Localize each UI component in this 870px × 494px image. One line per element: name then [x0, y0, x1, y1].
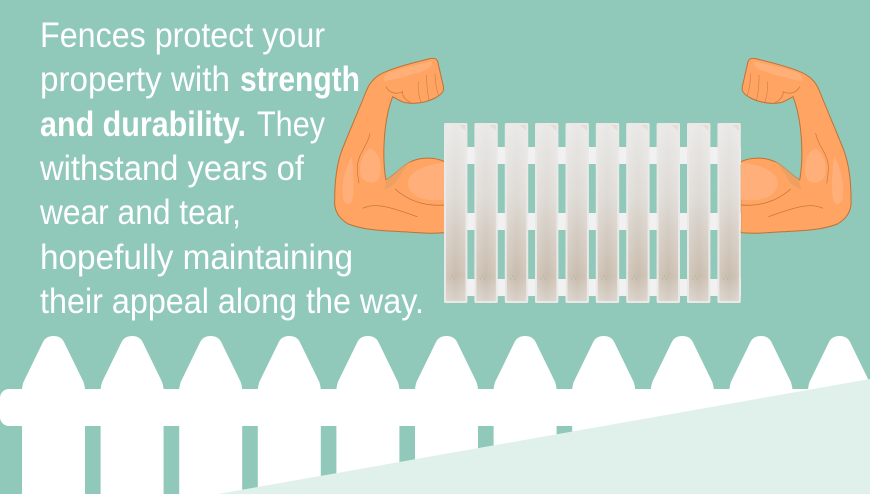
- illustration: large white picket fence: [0, 336, 870, 494]
- illustration: small fence panel: [444, 123, 741, 303]
- text block: fence strength: strength: [240, 60, 360, 99]
- text block: fence strength: wear and tear,: [39, 193, 241, 232]
- foreground: pale diagonal ground: [218, 379, 870, 494]
- text block: fence strength: their appeal along the way.: [40, 282, 424, 321]
- icon: left flexed arm: [335, 58, 445, 233]
- text block: fence strength: [39, 16, 424, 321]
- text block: fence strength: They: [257, 105, 325, 144]
- text block: fence strength: withstand years of: [39, 149, 304, 188]
- text block: fence strength: property with: [40, 60, 230, 99]
- text block: fence strength: Fences protect your: [40, 16, 325, 55]
- text block: fence strength: and durability.: [40, 105, 246, 144]
- text block: fence strength: hopefully maintaining: [40, 238, 353, 277]
- icon: right flexed arm: [741, 58, 851, 233]
